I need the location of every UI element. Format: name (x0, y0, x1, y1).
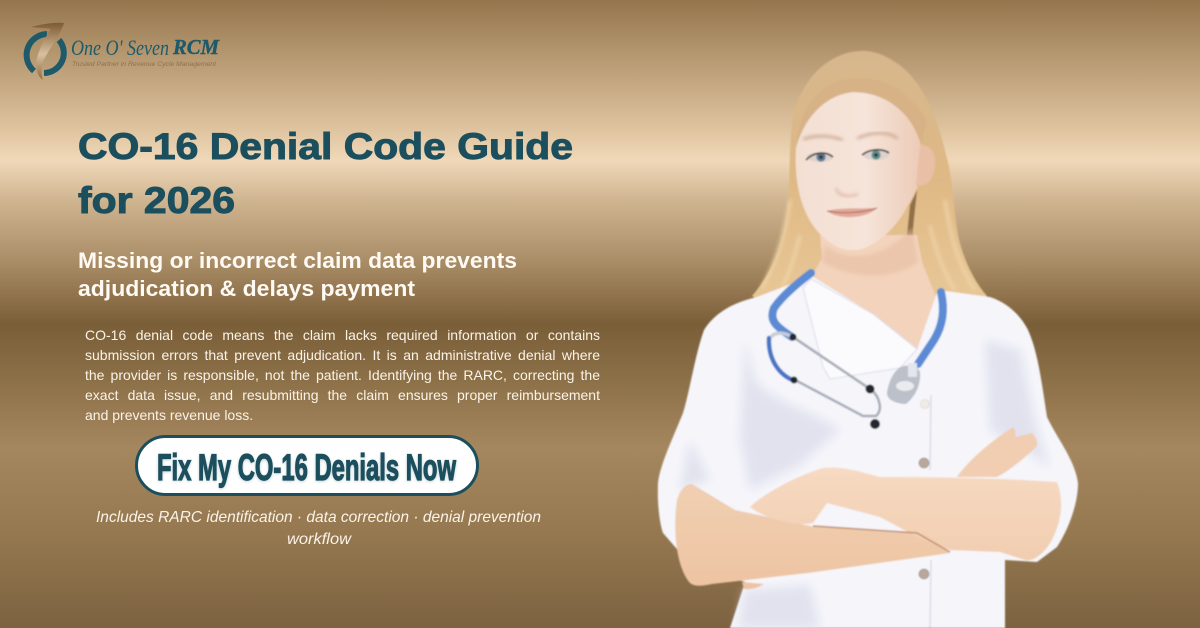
coat (658, 276, 1078, 628)
hair highlights (762, 200, 975, 290)
body paragraph: the provider is responsible, not the patient. Identifying the RARC, correcting the (85, 367, 600, 383)
tube left (772, 273, 811, 337)
fingers under arm (742, 582, 764, 589)
logo ring left arc (27, 34, 47, 71)
left eye (806, 152, 833, 162)
hair shadow by neck (906, 190, 917, 262)
mouth (827, 208, 877, 217)
metal arms (793, 337, 880, 416)
stethoscope chest piece (887, 363, 920, 404)
tube right (918, 292, 943, 364)
logo ring right arc (44, 40, 64, 73)
title line 1: CO-16 Denial Code Guide (78, 126, 573, 167)
stethoscope (769, 273, 943, 416)
subtitle line 2: adjudication & delays payment (78, 276, 416, 301)
coat centre seam (930, 395, 931, 628)
hair front strands (796, 78, 927, 148)
logo name: One O' Seven (71, 35, 169, 60)
metal top ring (772, 333, 792, 337)
right eye (862, 150, 889, 160)
fingers right hand (957, 427, 1037, 477)
button label: Fix My CO-16 Denials Now (157, 447, 456, 488)
body paragraph: and prevents revenue loss. (85, 407, 253, 423)
lower forearm (675, 484, 950, 586)
subtitle line 1: Missing or incorrect claim data prevents (78, 248, 517, 273)
coat buttons (919, 400, 930, 579)
eyebrows (804, 133, 897, 140)
logo RCM: RCM (172, 35, 220, 59)
mouth line (827, 208, 877, 213)
neck shadow (822, 228, 918, 276)
button label glow: Fix My CO-16 Denials Now (157, 448, 456, 489)
body paragraph: CO-16 denial code means the claim lacks required information or contains (85, 327, 600, 343)
title line 2: for 2026 (78, 180, 235, 221)
coat fold shadows (680, 340, 1050, 628)
arm crease shadow (813, 526, 950, 552)
upper forearm (750, 468, 1061, 560)
button pill (136, 436, 478, 494)
caption line 1: Includes RARC identification · data correction · denial prevention (96, 509, 541, 526)
title (78, 126, 573, 221)
nose (836, 188, 858, 196)
nurse illustration (658, 51, 1078, 628)
collar (803, 279, 917, 379)
caption line 2: workflow (287, 531, 352, 548)
tube loop (769, 338, 795, 381)
CTA button (136, 436, 478, 494)
neck (812, 235, 936, 349)
hair back (752, 51, 987, 312)
logo (27, 23, 220, 80)
logo tagline: Trusted Partner in Revenue Cycle Management (72, 61, 216, 68)
caption (96, 509, 541, 548)
stethoscope ear tips (790, 334, 880, 429)
ear (916, 145, 935, 186)
face (796, 92, 922, 250)
body paragraph: submission errors that prevent adjudication. It is an administrative denial where (85, 347, 600, 363)
logo swoosh (31, 23, 64, 80)
body paragraph (85, 327, 600, 423)
subtitle (78, 248, 517, 301)
body paragraph: exact data issue, and resubmitting the claim ensures proper reimbursement (85, 387, 600, 403)
